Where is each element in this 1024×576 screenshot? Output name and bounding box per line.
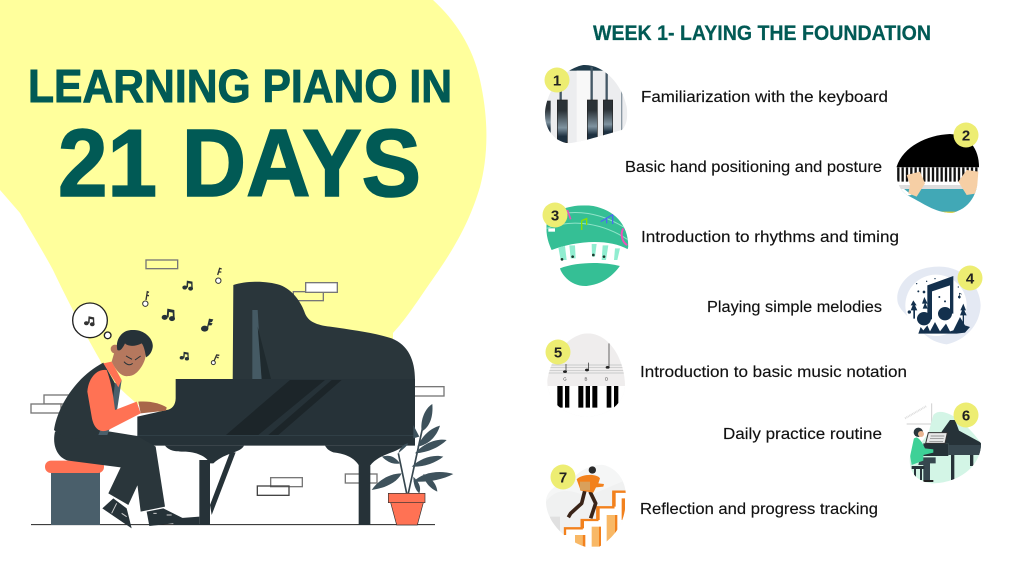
step 7 image: runner climbing steps	[546, 465, 626, 547]
step 2 badge	[954, 122, 978, 148]
step 6 badge	[954, 402, 978, 428]
step 5 image: notation over keys: D	[605, 376, 608, 381]
step 2	[625, 122, 982, 215]
step 4 image: music note with plants	[897, 267, 981, 344]
grand piano	[137, 282, 415, 525]
step 3 image: green keyboard and notes	[546, 205, 628, 286]
heading: week 1: WEEK 1- LAYING THE FOUNDATION	[593, 22, 931, 45]
title	[28, 60, 452, 217]
title: 21 DAYS	[58, 110, 421, 217]
step 5 image: notation over keys: G	[563, 376, 567, 381]
step 5	[546, 334, 906, 408]
step 6	[723, 402, 982, 483]
step 5 image: notation over keys	[548, 334, 625, 408]
step 2 label: Basic hand positioning and posture	[625, 159, 882, 176]
step 7 label: Reflection and progress tracking	[640, 501, 878, 518]
pianist	[54, 330, 183, 528]
step 2 image: hands on keyboard	[893, 133, 982, 215]
step 7	[543, 463, 878, 550]
illustration: pianist at grand piano	[31, 260, 453, 528]
potted plant	[372, 404, 453, 525]
step 4 badge	[958, 266, 982, 290]
floating music notes	[143, 268, 222, 365]
step 6 badge: 6	[962, 408, 970, 424]
step 1 image: piano keys	[543, 63, 630, 145]
step 1 badge	[544, 68, 570, 92]
step 4	[707, 266, 982, 344]
step 5 label: Introduction to basic music notation	[640, 364, 907, 381]
step 3	[542, 202, 899, 288]
step 4 label: Playing simple melodies	[707, 299, 882, 316]
step 2 badge: 2	[962, 128, 970, 144]
yellow background blob	[0, 0, 486, 440]
ground line	[31, 523, 435, 526]
step 3 badge: 3	[551, 208, 559, 224]
step 7 badge	[550, 464, 576, 490]
step 6 image: man playing piano	[905, 403, 982, 483]
step 5 image: notation over keys: B	[585, 376, 588, 381]
step 5 badge: 5	[554, 344, 562, 362]
step 3 badge	[542, 202, 568, 228]
thought bubble with music note	[73, 303, 111, 339]
step 4 badge: 4	[966, 270, 975, 288]
stool	[45, 461, 104, 525]
step 1 badge: 1	[553, 72, 561, 90]
step 1 label: Familiarization with the keyboard	[641, 89, 888, 106]
step 5 badge	[546, 340, 570, 364]
step 3 label: Introduction to rhythms and timing	[641, 229, 899, 246]
step 7 badge: 7	[559, 470, 567, 486]
title: LEARNING PIANO IN	[28, 60, 452, 112]
step 1	[543, 63, 888, 145]
step 6 label: Daily practice routine	[723, 426, 882, 443]
